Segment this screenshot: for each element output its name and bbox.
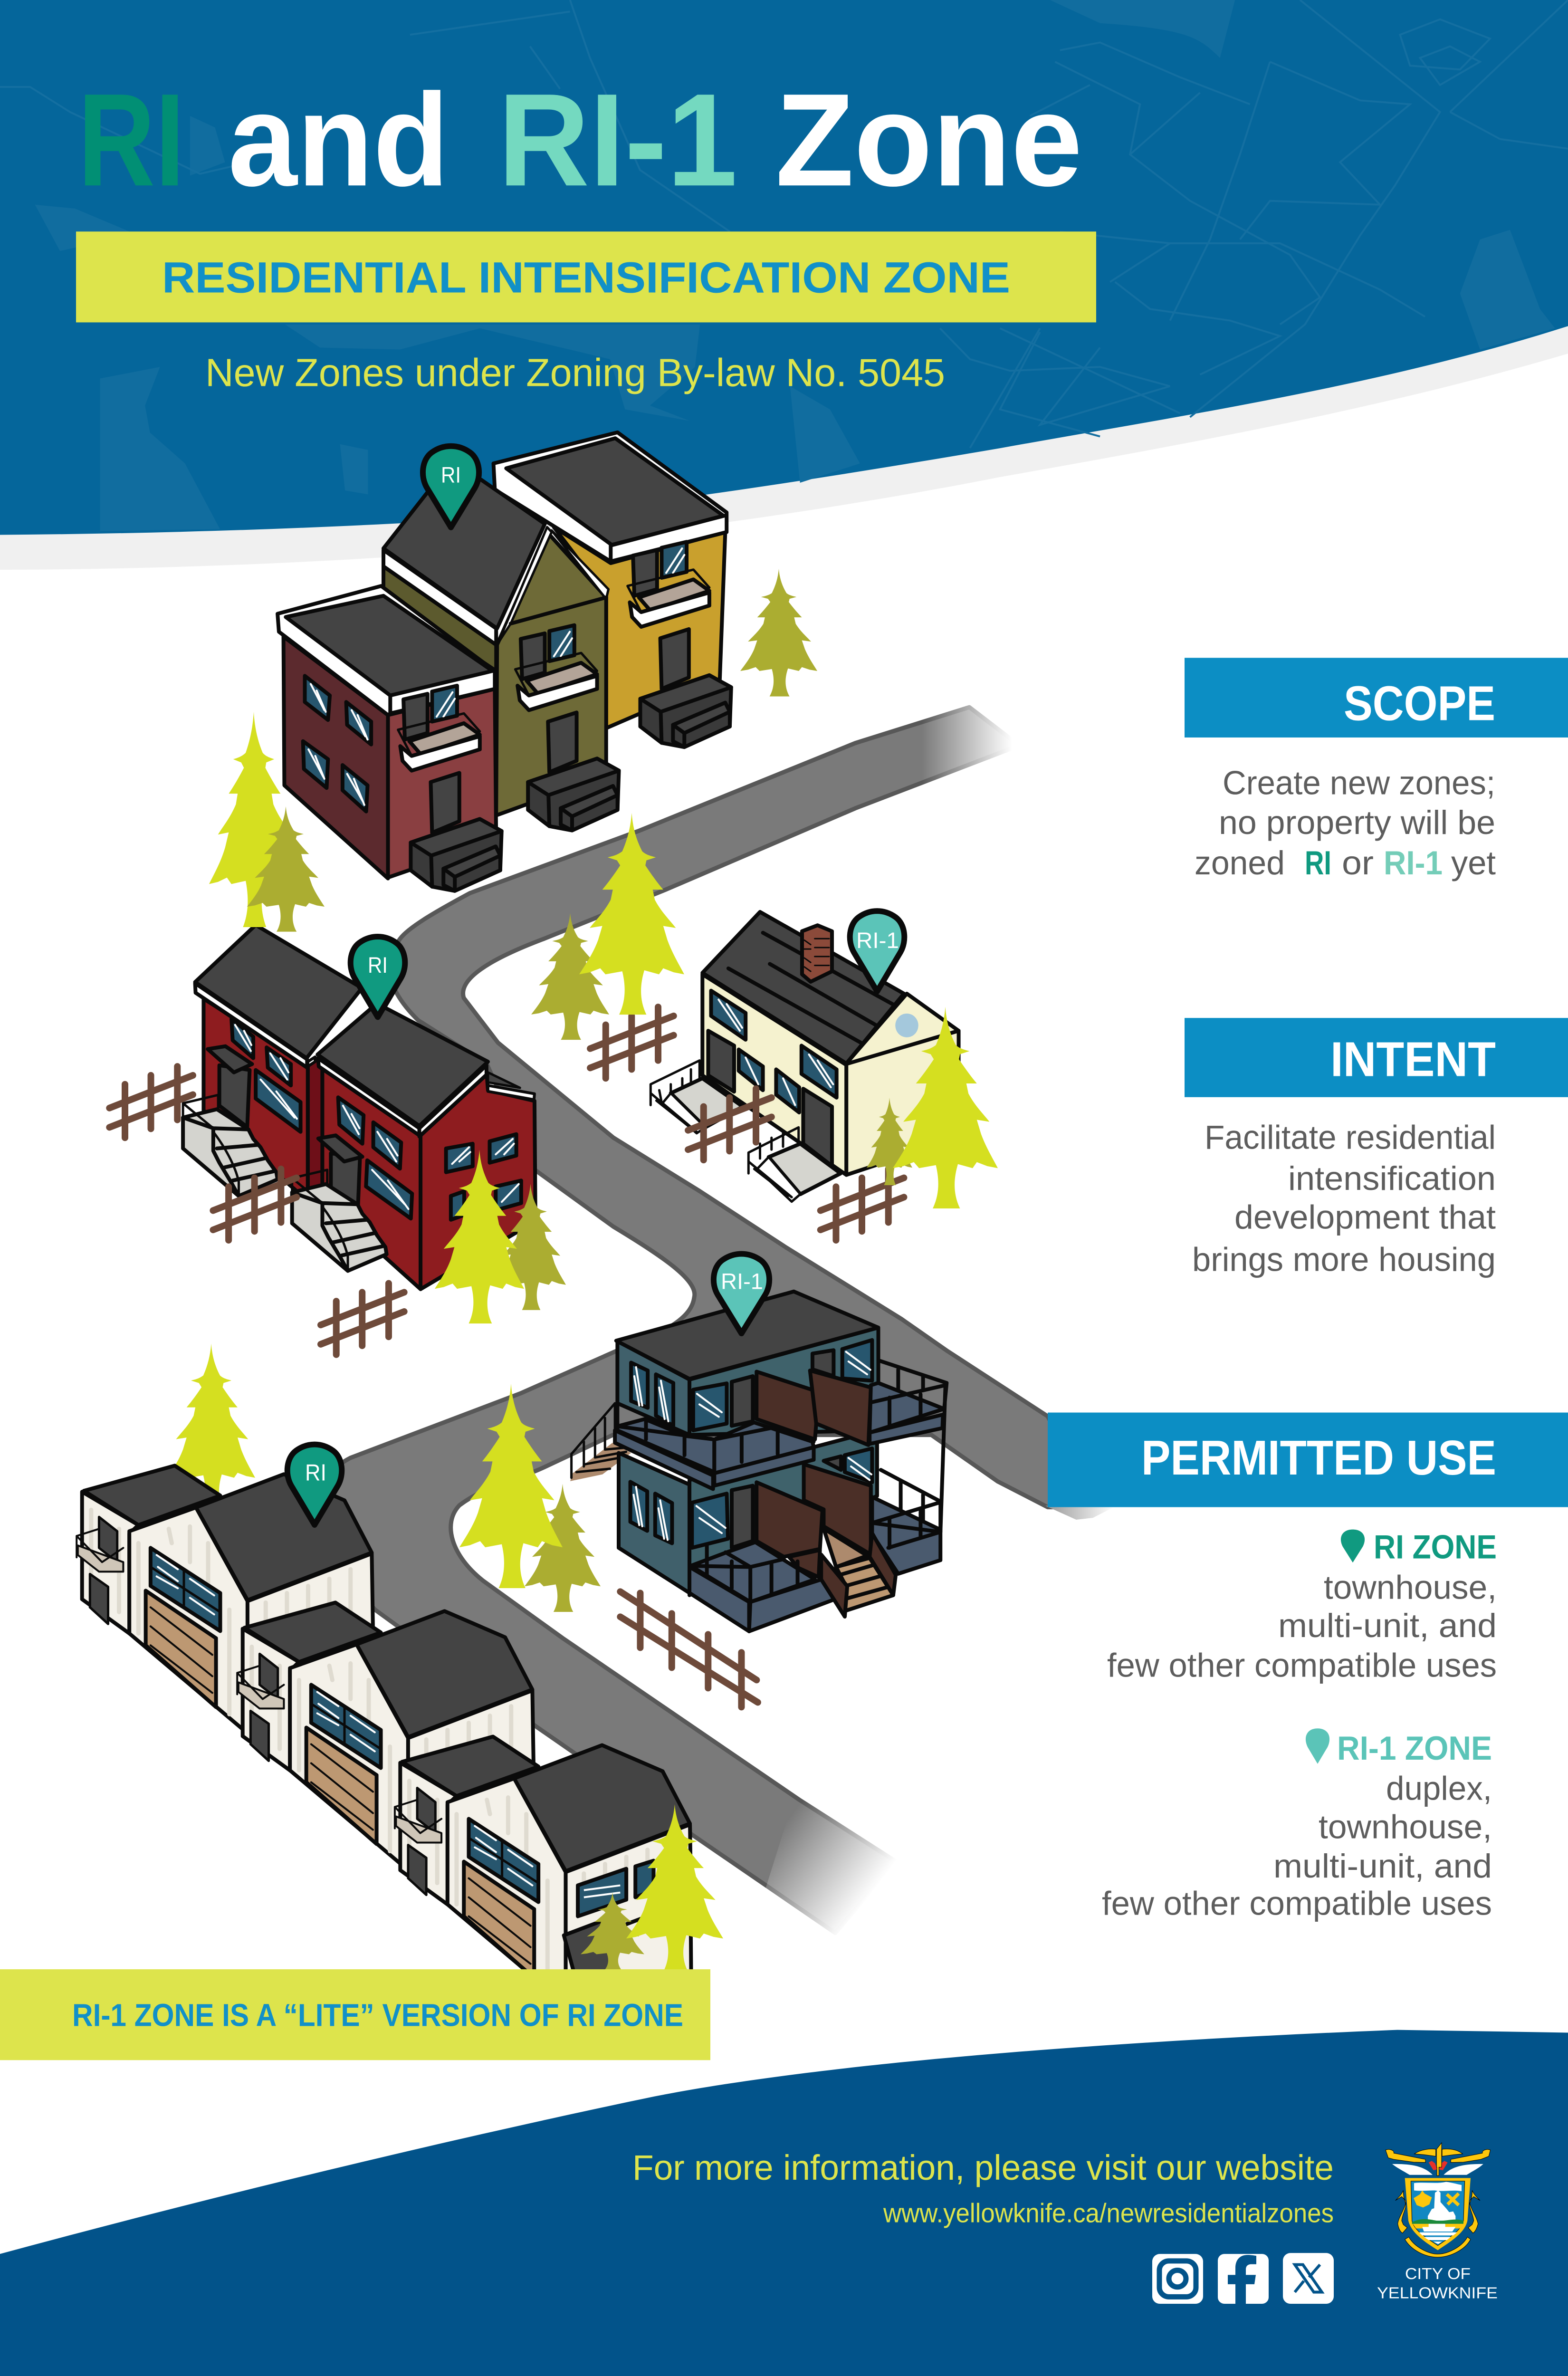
panel: permitted use: duplex, [1386,1770,1492,1807]
panel: scope: RI [1305,844,1331,882]
panel: scope: SCOPE [1344,677,1495,731]
panel: intent [1185,1018,1568,1278]
fence near multi-unit [620,1591,758,1707]
panel: permitted use: townhouse, [1319,1808,1492,1846]
panel: permitted use [1048,1413,1568,1922]
title: RI-1 [498,67,737,214]
pin: RI top: RI [441,463,461,488]
footer info text: For more information, please visit our website [632,2148,1334,2187]
panel: permitted use: RI-1 ZONE [1337,1730,1492,1767]
panel: scope: Create new zones; [1223,764,1495,802]
panel: permitted use: townhouse, [1324,1569,1497,1607]
title: Zone [775,67,1082,214]
by-law line: New Zones under Zoning By-law No. 5045 [205,351,945,395]
trees: conifers around the neighbourhood [209,569,998,1972]
icon: facebook [1218,2254,1269,2304]
building: red duplex [183,925,535,1289]
panel: permitted use: few other compatible uses [1107,1647,1497,1684]
panel: scope [1185,658,1568,882]
callout: lite version [0,1969,710,2060]
panel: permitted use: multi-unit, and [1273,1848,1492,1885]
footer panel [0,2030,1568,2376]
road tail below permitted use bar [1045,1506,1117,1520]
panel: intent: INTENT [1330,1033,1496,1087]
subtitle banner [76,231,1096,322]
pin: RI top [423,446,479,527]
panel: scope: or [1342,844,1374,882]
pin: RI-1 house: RI-1 [856,929,899,953]
pin: RI row houses: RI [305,1460,326,1486]
panel: scope: yet [1451,844,1496,882]
panel: intent: brings more housing [1192,1241,1496,1278]
logo caption: YELLOWKNIFE [1377,2285,1498,2302]
panel: scope: zoned [1195,844,1285,882]
panel: permitted use: RI ZONE [1374,1528,1497,1566]
road fade: south end [760,1784,931,1961]
pin: RI duplex [351,937,405,1017]
panel: intent: Facilitate residential [1205,1119,1496,1156]
panel: scope: RI-1 [1384,844,1443,882]
pin: RI-1 house [850,911,904,991]
subtitle banner: RESIDENTIAL INTENSIFICATION ZONE [162,253,1010,302]
pin: RI-1 multi-unit: RI-1 [721,1269,763,1294]
website url: www.yellowknife.ca/newresidentialzones [883,2198,1334,2228]
pin: RI duplex: RI [368,953,388,978]
building: row of three garage houses [76,1466,691,2004]
building: RI-1 multi-unit with decks [570,1292,947,1631]
panel: permitted use: few other compatible uses [1102,1885,1492,1922]
panel: permitted use: PERMITTED USE [1141,1431,1496,1485]
road fade: north end [917,694,1055,801]
panel: intent: development that [1234,1198,1496,1236]
fences group [109,1007,904,1355]
logo: city crest [1386,2143,1491,2257]
pin: RI row houses [287,1445,342,1525]
logo caption: CITY OF [1405,2265,1471,2283]
title: and [228,67,449,214]
callout: lite version: RI-1 ZONE IS A “LITE” VERSION OF RI ZONE [72,1998,683,2033]
panel: permitted use: multi-unit, and [1278,1607,1497,1645]
panel: intent: intensification [1288,1160,1496,1198]
building: cream house with chimney [650,912,959,1202]
icon: X [1283,2253,1334,2304]
header panel with map pattern [0,0,1568,570]
icon: instagram [1152,2254,1203,2304]
tree behind row houses [167,1343,255,1511]
building: triple townhouse block [277,432,731,891]
panel: scope: no property will be [1219,804,1495,842]
title: RI [78,67,185,214]
pin: RI-1 multi-unit [714,1254,769,1333]
road network [313,707,1093,1933]
